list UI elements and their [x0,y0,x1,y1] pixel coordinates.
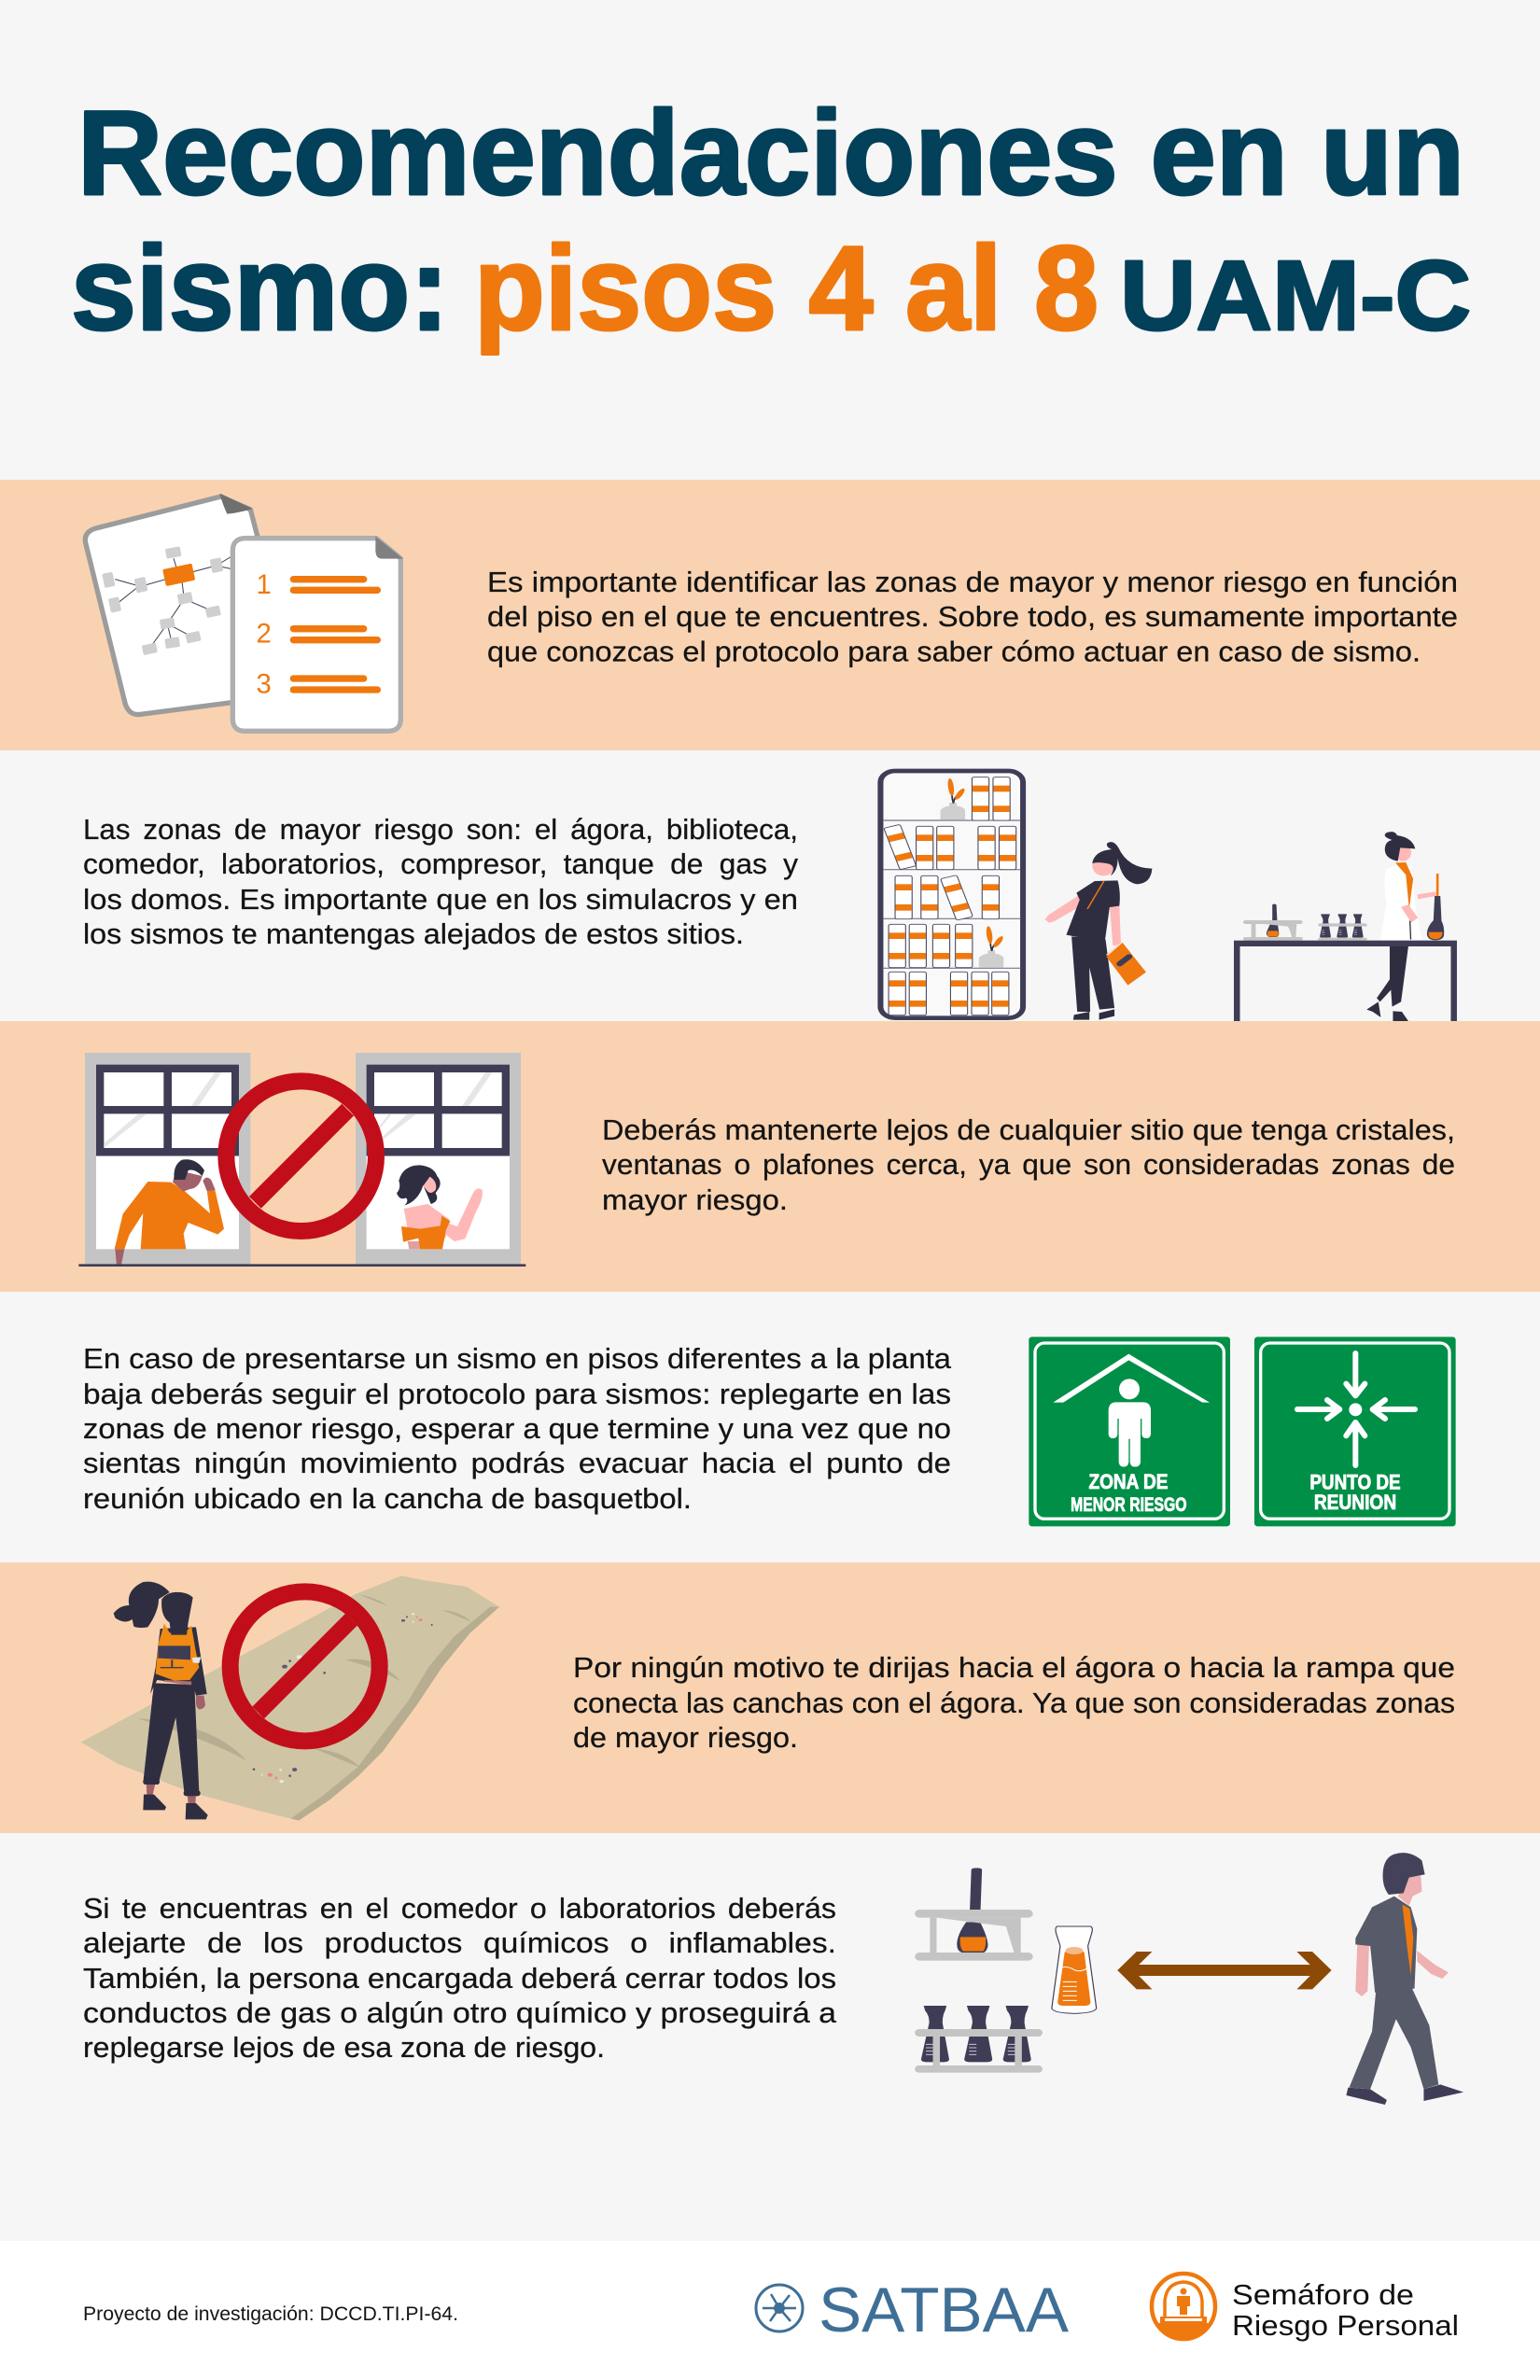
text block: cristales y ventanas: ventanas o plafones cerca, ya que son consideradas zonas de [602,1149,1455,1181]
text block: zonas de riesgo y protocolo [487,567,1458,668]
icon: documents with mind map and numbered list: 2 [257,619,272,650]
text block: protocolo: reunión ubicado en la cancha de basquetbol. [83,1483,692,1515]
icon: documents with mind map and numbered list: 3 [257,669,272,700]
logo: Semáforo de Riesgo Personal: Riesgo Personal [1232,2309,1459,2342]
text block: zonas de riesgo y protocolo: del piso en el que te encuentres. Sobre todo, es sumamente importante [487,601,1458,633]
illustration: ramp, woman and prohibition sign [81,1575,499,1821]
figure: man at window [115,1159,224,1266]
text block: productos químicos: También, la persona encargada deberá cerrar todos los [83,1963,836,1995]
sign: punto de reunion: REUNION [1314,1491,1396,1514]
text block: ágora y rampa [573,1652,1455,1754]
text block: ágora y rampa: Por ningún motivo te dirijas hacia el ágora o hacia la rampa que [573,1652,1455,1684]
logo: SATBAA: SATBAA [819,2275,1070,2345]
sign: zona de menor riesgo: MENOR RIESGO [1071,1493,1186,1516]
panel: no dirigirse al ágora [0,1562,1540,1833]
text block: zonas de mayor riesgo: comedor, laboratorios, compresor, tanque de gas y [83,848,799,880]
icon: prohibition sign [231,1591,380,1741]
panel: zonas de mayor riesgo [0,750,1540,1021]
title: sismo: [71,222,449,356]
figure: man walking away [1346,1853,1463,2105]
text: project reference: Proyecto de investigación: DCCD.TI.PI-64. [83,2303,458,2325]
icon: prohibition sign [226,1081,376,1231]
illustration: bookcase and woman with book [880,771,1152,1020]
text block: zonas de mayor riesgo: los domos. Es importante que en los simulacros y en [83,884,798,916]
text block: protocolo: En caso de presentarse un sismo en pisos diferentes a la planta [83,1343,951,1375]
text block: zonas de mayor riesgo [83,814,799,950]
text block: ágora y rampa: de mayor riesgo. [573,1722,798,1754]
icon: documents with mind map and numbered list: 1 [257,569,272,600]
footer [0,2241,1540,2380]
logo: Semáforo de Riesgo Personal [1152,2274,1459,2342]
panel: protocolo para sismos [0,1292,1540,1562]
logo: Semáforo de Riesgo Personal: Semáforo de [1232,2278,1414,2311]
text block: ágora y rampa: conecta las canchas con el ágora. Ya que son consideradas zonas [573,1687,1455,1719]
text block: productos químicos: replegarse lejos de esa zona de riesgo. [83,2032,605,2064]
arrow: keep distance double arrow [1117,1952,1332,1989]
sign: punto de reunion [1254,1337,1456,1526]
title: Recomendaciones en un [77,87,1464,220]
text block: productos químicos: Si te encuentras en el comedor o laboratorios deberás [83,1893,836,1925]
text block: protocolo: zonas de menor riesgo, esperar a que termine y una vez que no [83,1413,951,1445]
text block: protocolo: sientas ningún movimiento podrás evacuar hacia el punto de [83,1448,951,1479]
illustration: laboratory table and scientist [1234,832,1457,1021]
figure: woman with backpack [114,1582,208,1819]
title: pisos 4 al 8 [474,222,1099,356]
text block: zonas de riesgo y protocolo: Es importante identificar las zonas de mayor y menor riesgo en función [487,567,1458,598]
title [71,87,1471,356]
illustration: two windows with prohibition sign [78,1053,525,1266]
text block: cristales y ventanas [602,1114,1455,1216]
text block: productos químicos [83,1893,836,2064]
panel: comedor y laboratorios [0,1833,1540,2241]
title: UAM-C [1120,241,1471,351]
text block: zonas de riesgo y protocolo: que conozcas el protocolo para saber cómo actuar en caso de sismo. [487,637,1421,668]
text block: productos químicos: conductos de gas o algún otro químico y proseguirá a [83,1997,836,2029]
text block: cristales y ventanas: Deberás mantenerte lejos de cualquier sitio que tenga cristales, [602,1114,1455,1146]
icon: documents with mind map and numbered list [85,494,403,731]
text block: zonas de mayor riesgo: los sismos te mantengas alejados de estos sitios. [83,918,744,950]
sign: punto de reunion: PUNTO DE [1309,1470,1401,1493]
text block: protocolo: baja deberás seguir el protocolo para sismos: replegarte en las [83,1379,951,1410]
sign: zona de menor riesgo [1029,1337,1230,1526]
text block: zonas de mayor riesgo: Las zonas de mayor riesgo son: el ágora, biblioteca, [83,814,798,846]
panel: identificar zonas y protocolo [0,480,1540,750]
text block: protocolo [83,1343,951,1515]
sign: zona de menor riesgo: ZONA DE [1088,1470,1168,1493]
text block: productos químicos: alejarte de los productos químicos o inflamables. [83,1927,836,1959]
text block: cristales y ventanas: mayor riesgo. [602,1184,788,1216]
illustration: chemical glassware [915,1868,1097,2073]
panel: lejos de cristales [0,1021,1540,1292]
figure: woman at window [397,1165,483,1249]
